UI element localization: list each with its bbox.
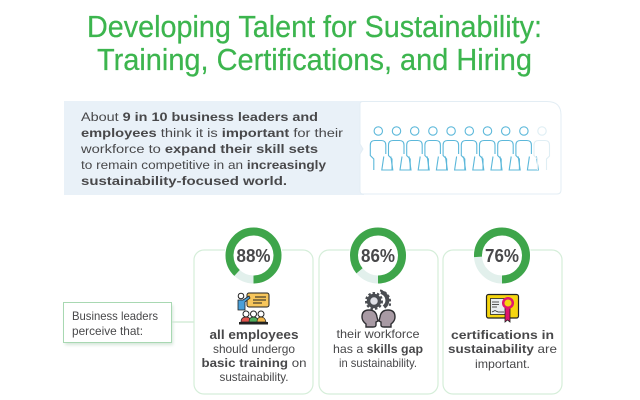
card: 76%: [443, 226, 562, 394]
donut: 76%: 76%: [485, 245, 519, 266]
card text: their workforce: [336, 327, 420, 341]
card text: important.: [475, 357, 530, 371]
donut: 86%: [349, 226, 407, 284]
donut: 88%: [224, 226, 282, 284]
card text: [202, 327, 306, 384]
label: business leaders: [64, 302, 194, 345]
title: Developing Talent for Sustainability:: [87, 10, 542, 44]
card text: basic training on: [202, 356, 306, 370]
card: 86%: [319, 226, 438, 394]
icon: certificate: [486, 294, 518, 322]
statement text: sustainability-focused world.: [81, 174, 287, 188]
pictogram panel: 9 of 10 people: [360, 102, 561, 194]
card text: all employees: [210, 327, 298, 342]
card: 88%: [194, 226, 313, 394]
statement text: to remain competitive in an increasingly: [81, 158, 326, 172]
card text: should undergo: [213, 342, 295, 356]
donut: 76%: [473, 226, 531, 284]
card text: in sustainability.: [339, 356, 417, 370]
label: business leaders: perceive that:: [72, 324, 143, 338]
statement text: About 9 in 10 business leaders and: [81, 110, 318, 124]
title: Training, Certifications, and Hiring: [97, 43, 532, 77]
label: business leaders: Business leaders: [72, 309, 158, 323]
statement text: employees think it is important for their: [81, 126, 343, 140]
card text: [333, 327, 423, 370]
card text: [448, 328, 557, 371]
card text: sustainability are: [448, 342, 557, 356]
statement text: [80, 110, 343, 188]
donut: 88%: 88%: [236, 245, 270, 266]
card text: certifications in: [451, 328, 554, 342]
title: [87, 10, 542, 77]
statement text: workforce to expand their skill sets: [80, 142, 318, 156]
card text: has a skills gap: [333, 342, 423, 356]
icon: gears and heads: [362, 290, 395, 327]
card text: sustainability.: [220, 370, 288, 384]
panel: 9 in 10 statement: [64, 101, 561, 195]
donut: 86%: 86%: [361, 245, 395, 266]
icon: trainer with audience: [238, 293, 269, 324]
